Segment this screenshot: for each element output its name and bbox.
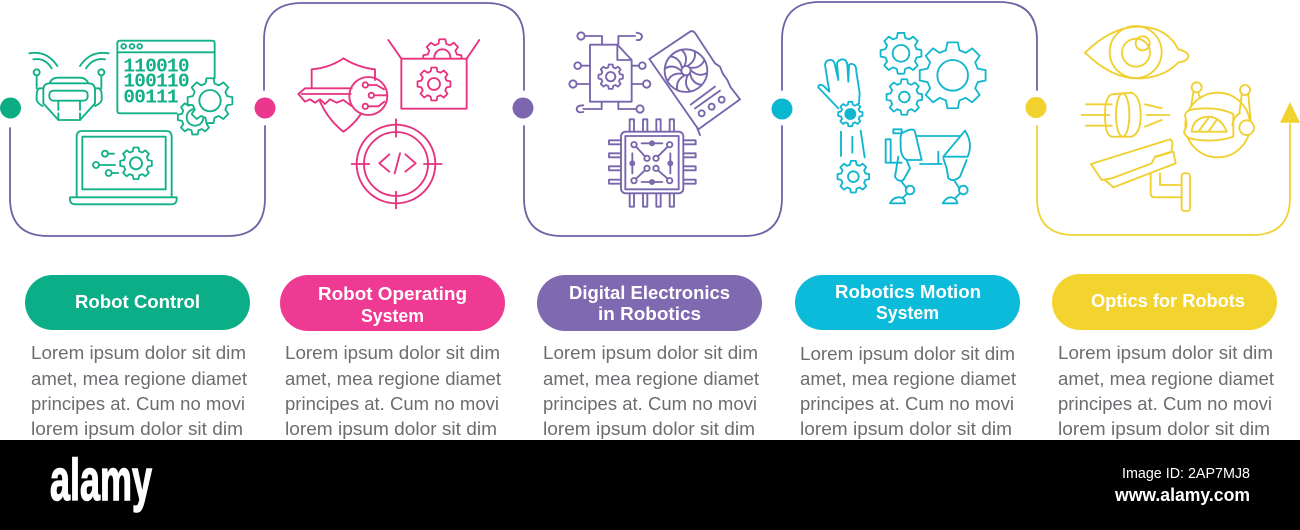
icon: robot dog [886,129,970,203]
text: column 5: amet, mea regione diamet [1058,369,1274,389]
text: column 5 [1058,343,1274,439]
node dots [0,97,1046,120]
text: column 1: principes at. Cum no movi [31,394,245,414]
image id: Image ID: 2AP7MJ8 [1122,465,1250,482]
arrow head [1280,102,1300,123]
text: column 2: Lorem ipsum dolor sit dim [285,343,500,363]
icon: document circuit [569,32,650,113]
text: column 3 [543,343,759,439]
icon: shield and key [298,58,387,132]
icon: binary code window [117,41,232,134]
text: column 5: principes at. Cum no movi [1058,394,1272,414]
pill: robot operating system: Robot Operating [318,284,467,304]
dot: step 5 [1026,97,1046,118]
icon: security camera [1091,139,1190,211]
text: column 1: lorem ipsum dolor sit dim [31,419,243,439]
text: column 3: Lorem ipsum dolor sit dim [543,343,758,363]
pill: robot operating system [280,275,505,331]
pill: digital electronics: in Robotics [598,304,701,324]
footer band [0,440,1300,530]
website: www.alamy.com [1114,485,1250,505]
frame: step 1 [10,126,265,236]
icon group: robotics motion [818,33,986,203]
icon: binary code window: 00111 [123,86,178,108]
text: column 4: amet, mea regione diamet [800,369,1016,389]
text: column 2 [285,343,501,439]
icon group: digital electronics [569,31,740,207]
text: column 5: lorem ipsum dolor sit dim [1058,419,1270,439]
icon group: robot control [29,41,232,204]
icon: eye [1085,26,1188,78]
frame: step 2 [264,3,524,90]
pill: robotics motion [795,275,1020,330]
icon: microchip [609,119,696,207]
dot: step 2 [254,98,276,118]
frame: step 4 [782,2,1037,90]
pill: optics: Optics for Robots [1091,291,1245,311]
pill: robotics motion: System [876,303,939,323]
frame: step 3 [524,126,782,236]
text: column 1: Lorem ipsum dolor sit dim [31,343,246,363]
icon: box with gears [388,39,479,109]
heading pills [25,274,1277,331]
flow frame [10,2,1290,236]
text: column 3: lorem ipsum dolor sit dim [543,419,755,439]
icon: robot head [1184,82,1254,157]
text: column 3: principes at. Cum no movi [543,394,757,414]
icon: laptop with gear [70,131,177,204]
icon group: robot operating system [298,39,479,208]
text: column 3: amet, mea regione diamet [543,369,759,389]
text: column 2: principes at. Cum no movi [285,394,499,414]
icon: graphics card [649,31,740,135]
text: column 2: lorem ipsum dolor sit dim [285,419,497,439]
body text [31,343,1274,439]
icon: robotic hand [818,59,869,192]
pill: digital electronics [537,275,762,331]
text: column 4: Lorem ipsum dolor sit dim [800,344,1015,364]
text: column 4 [800,344,1016,439]
text: column 1 [31,343,247,439]
pill: digital electronics: Digital Electronics [569,283,730,303]
text: column 4: lorem ipsum dolor sit dim [800,419,1012,439]
dot: step 3 [512,98,534,118]
dot: step 4 [772,98,792,120]
icon: gear cluster [881,33,986,115]
logo: alamy: alamy [50,448,152,513]
pill: optics [1052,274,1277,330]
frame: step 5 [1037,124,1290,235]
text: column 1: amet, mea regione diamet [31,369,247,389]
dot: step 1 [0,98,21,118]
icon: lens [1082,93,1169,137]
pill: robot control: Robot Control [75,292,200,312]
pill: robotics motion: Robotics Motion [835,282,981,302]
text: column 2: amet, mea regione diamet [285,369,501,389]
text: column 4: principes at. Cum no movi [800,394,1014,414]
icon group: optics [1082,26,1254,211]
pill: robot operating system: System [361,306,424,326]
text: column 5: Lorem ipsum dolor sit dim [1058,343,1273,363]
pill: robot control [25,275,250,330]
icon: code target [352,119,442,208]
icon: robot head [29,53,109,120]
icon: binary code window: 100110 [123,71,189,93]
icon: binary code window: 110010 [123,56,189,78]
